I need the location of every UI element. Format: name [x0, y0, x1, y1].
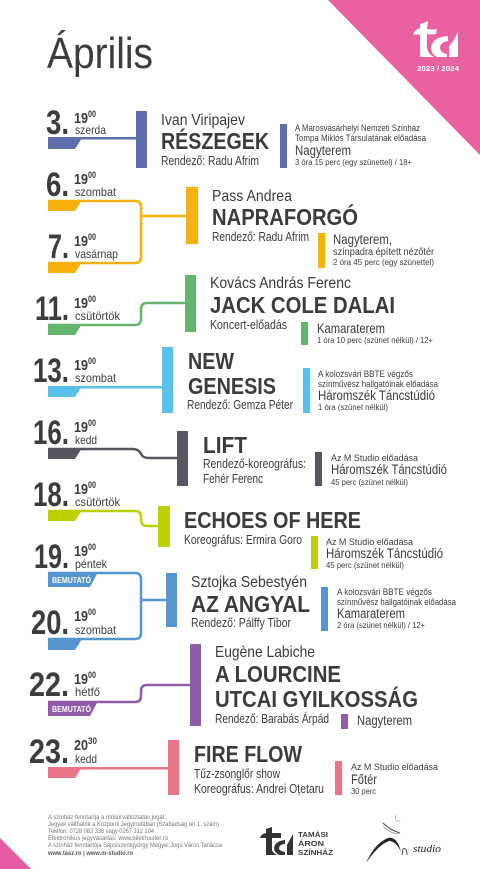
date: 3 szerda: szerda [75, 123, 106, 137]
event: Napraforgó [46, 166, 435, 273]
venue info [341, 713, 412, 729]
show info: FIRE FLOW [194, 741, 303, 767]
show info: UTCAI GYILKOSSÁG [215, 685, 418, 712]
venue info: Főtér [351, 772, 377, 787]
date: 7 vasárnap: 19 [74, 233, 88, 250]
date: 13 szombat [33, 352, 117, 390]
venue info: 1 óra (szünet nélkül) [318, 403, 388, 412]
show info [215, 644, 418, 726]
event: Fire Flow [29, 733, 438, 796]
logo: Tamási Áron Színház: SZÍNHÁZ [298, 848, 333, 857]
venue info: 3 óra 15 perc (egy szünettel) / 18+ [295, 158, 412, 167]
show info: Koreográfus: Ermira Goro [184, 533, 302, 547]
date: 16 kedd: kedd [75, 433, 97, 447]
date: 20 szombat: 20. [31, 604, 69, 642]
date: 16 kedd: 16. [33, 414, 69, 452]
show info: GENESIS [188, 373, 276, 399]
venue info: Az M Studio előadása [331, 453, 418, 463]
venue info: Háromszék Táncstúdió [326, 546, 443, 561]
venue info: Tompa Miklós Társulatának előadása [295, 133, 426, 143]
event: Az angyal [31, 538, 456, 650]
event: A Lourcine utcai gyilkosság [29, 644, 418, 729]
date: 19 péntek: péntek [75, 557, 108, 571]
event: Lift [33, 414, 447, 487]
show info: JACK COLE DALAI [210, 292, 395, 318]
show info: Sztojka Sebestyén [191, 574, 307, 591]
venue info: 45 perc (szünet nélkül) [326, 561, 404, 570]
date: 19 péntek: 00 [88, 542, 96, 552]
date: 11 csütörtök: 19 [74, 295, 88, 312]
date: 13 szombat: 19 [74, 357, 88, 374]
show info [194, 741, 324, 796]
show info [212, 188, 358, 244]
connector and flag [48, 740, 179, 795]
date: 13 szombat: 00 [88, 356, 96, 366]
show info [203, 432, 306, 486]
venue info: színművész hallgatóinak előadása [318, 379, 438, 389]
show info: Rendező: Pálffy Tibor [191, 616, 291, 630]
venue info: színpadra épített nézőtér [333, 247, 435, 258]
logo: M Studio: studio [413, 843, 442, 855]
venue info: Nagyterem, [333, 232, 392, 247]
show info [191, 574, 310, 630]
venue info [303, 368, 438, 413]
date: 6 szombat: szombat [75, 185, 117, 199]
show info [187, 348, 293, 412]
footer text: A színház fenntartója Sepsiszentgyörgy Megyei Jogú Város Tanácsa [48, 842, 222, 849]
venue info: Nagyterem [295, 143, 351, 158]
date: 23 kedd [29, 733, 97, 771]
date: 19 péntek: 19 [74, 543, 88, 560]
logo: Tamási Áron Színház: ÁRON [298, 839, 324, 848]
venue info: Kamaraterem [337, 606, 405, 621]
show info: Rendező-koreográfus: [203, 457, 306, 471]
title: Április [47, 29, 153, 78]
date: 22 hétfő: 19 [74, 671, 88, 688]
connector and flags [48, 187, 198, 273]
connector and flags [48, 572, 177, 650]
show info: Rendező: Radu Afrim [161, 154, 259, 168]
date: 3 szerda: 19 [74, 110, 88, 127]
venue info: Kamaraterem [317, 321, 385, 336]
venue info: 2 óra 45 perc (egy szünettel) [333, 258, 434, 267]
date: 6 szombat: 19 [74, 171, 88, 188]
show info: NAPRAFORGÓ [212, 203, 358, 230]
venue info: Háromszék Táncstúdió [331, 462, 447, 477]
show info [210, 275, 395, 332]
badge: bemutató: BEMUTATÓ [52, 705, 91, 714]
venue info: A kolozsvári BBTE végzős [337, 587, 432, 597]
date: 18 csütörtök: 00 [88, 480, 96, 490]
date: 19 péntek [34, 538, 108, 576]
pink corner triangle top right [328, 0, 480, 155]
venue info [301, 321, 433, 345]
date: 6 szombat: 6. [46, 166, 69, 204]
date: 3 szerda: 00 [88, 109, 96, 119]
show info: Eugène Labiche [215, 644, 315, 661]
venue info: 1 óra 10 perc (szünet nélkül) / 12+ [317, 336, 433, 345]
event: Jack Cole dalai [35, 275, 433, 345]
venue info [335, 761, 438, 796]
event: Részegek [46, 104, 426, 168]
pink corner triangle bottom left [0, 838, 31, 869]
date: 7 vasárnap: 00 [88, 232, 96, 242]
show info: Koncert-előadás [210, 318, 287, 332]
footer text: A színház fenntartja a műsorváltoztatás jogát. [48, 814, 166, 821]
venue info: 45 perc (szünet nélkül) [331, 478, 408, 487]
date: 13 szombat: 13. [33, 352, 69, 390]
connector and flag [48, 111, 147, 168]
logo: M Studio [366, 815, 442, 863]
footer text [47, 814, 222, 857]
date: 18 csütörtök: csütörtök [75, 495, 121, 509]
date: 11 csütörtök: csütörtök [75, 309, 121, 323]
show info: Koreográfus: Andrei Oțetaru [194, 782, 324, 796]
date: 16 kedd: 19 [74, 419, 88, 436]
date: 20 szombat: szombat [75, 623, 117, 637]
show info: AZ ANGYAL [191, 591, 310, 617]
date: 22 hétfő: 22. [29, 666, 69, 704]
venue info [321, 587, 456, 631]
show info: Kovács András Ferenc [210, 275, 351, 292]
venue info: A kolozsvári BBTE végzős [318, 369, 413, 379]
show info: NEW [188, 348, 235, 374]
badge: bemutató: BEMUTATÓ [52, 576, 91, 585]
venue info: 2 óra (szünet nélkül) / 12+ [337, 621, 425, 630]
date: 19 péntek: 19. [34, 538, 69, 576]
show info: Tűz-zsonglőr show [194, 767, 281, 781]
venue info [318, 232, 435, 268]
date: 18 csütörtök: 18. [33, 476, 69, 514]
show info: Fehér Ferenc [203, 472, 263, 486]
logo: ta season: 2023 / 2024 [417, 66, 459, 73]
date: 16 kedd: 00 [88, 418, 96, 428]
connector and flag [48, 431, 188, 486]
venue info: A Marosvásárhelyi Nemzeti Színház [295, 123, 420, 133]
date: 7 vasárnap: vasárnap [75, 247, 118, 261]
date: 18 csütörtök: 19 [74, 481, 88, 498]
date: 7 vasárnap [48, 228, 118, 266]
connector and flag [48, 275, 196, 335]
venue info: Nagyterem [357, 713, 412, 728]
show info: Ivan Viripajev [161, 112, 245, 129]
logo: Tamási Áron Színház: TAMÁSI [298, 830, 328, 839]
show info [184, 507, 361, 547]
venue info: Az M Studio előadása [351, 762, 438, 772]
logo: ta season [413, 21, 459, 73]
connector and flag [48, 506, 170, 547]
date: 23 kedd: 23. [29, 733, 69, 771]
date: 18 csütörtök [33, 476, 121, 514]
footer text: Jegyek válthatók a Központi Jegyirodában (Szabadság tér 1. szám) [48, 821, 219, 828]
footer text: Elektronikus jegyvásárlás: www.biletmaster.ro [48, 835, 168, 842]
logo: Tamási Áron Színház [260, 827, 333, 857]
date: 6 szombat: 00 [88, 170, 96, 180]
venue info: 30 perc [351, 787, 376, 796]
date: 20 szombat: 19 [74, 608, 88, 625]
footer text: www.tasz.ro | www.m-studio.ro [47, 850, 133, 857]
date: 22 hétfő: 00 [88, 670, 96, 680]
date: 13 szombat: szombat [75, 371, 117, 385]
event: Echoes of Here [33, 476, 443, 570]
venue info: Az M Studio előadása [326, 537, 413, 547]
venue info [280, 123, 426, 168]
date: 3 szerda [46, 104, 106, 142]
show info: LIFT [203, 432, 248, 458]
show info: Rendező: Barabás Árpád [215, 711, 329, 726]
date: 11 csütörtök [35, 290, 121, 328]
show info: Rendező: Radu Afrim [212, 230, 309, 244]
footer text: Telefon: 0728 083 336 vagy 0267 312 104 [48, 828, 154, 835]
date: 20 szombat [31, 604, 117, 642]
date: 7 vasárnap: 7. [48, 228, 69, 266]
show info: Pass Andrea [212, 188, 292, 205]
connector and flag [48, 644, 201, 726]
show info: ECHOES OF HERE [184, 507, 361, 533]
show info [161, 112, 269, 168]
date: 20 szombat: 00 [88, 607, 96, 617]
connector and flag [48, 347, 173, 413]
date: 23 kedd: 20 [74, 737, 88, 754]
date: 22 hétfő: hétfő [75, 685, 100, 699]
venue info: Háromszék Táncstúdió [318, 388, 435, 403]
date: 23 kedd: kedd [75, 752, 97, 766]
event: New Genesis [33, 347, 438, 413]
date: 23 kedd: 30 [88, 736, 97, 746]
show info: Rendező: Gemza Péter [187, 398, 293, 412]
date: 3 szerda: 3. [46, 104, 69, 142]
date: 6 szombat [46, 166, 117, 204]
venue info [311, 536, 443, 570]
show info: A LOURCINE [215, 661, 341, 687]
show info: RÉSZEGEK [161, 127, 269, 154]
venue info [315, 452, 447, 487]
date: 11 csütörtök: 11. [35, 290, 69, 328]
venue info: színművész hallgatóinak előadása [337, 597, 456, 607]
date: 11 csütörtök: 00 [88, 294, 96, 304]
date: 22 hétfő [29, 666, 100, 704]
